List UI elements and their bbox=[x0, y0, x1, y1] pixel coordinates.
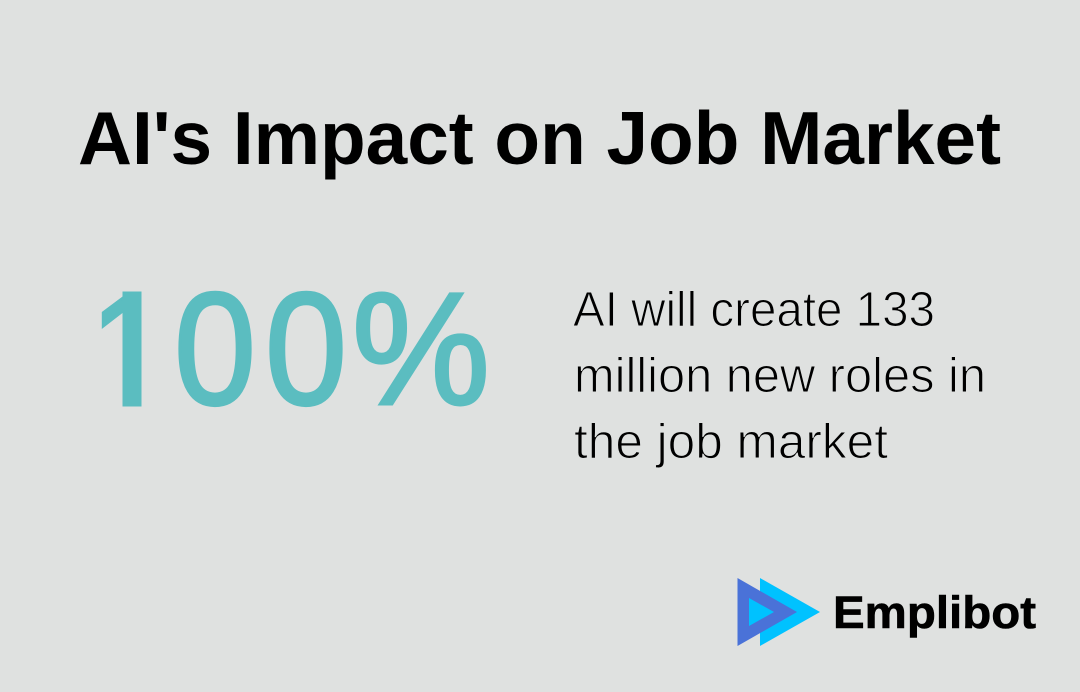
infographic canvas bbox=[80, 110, 1036, 646]
title: AI's Impact on Job Market bbox=[78, 96, 1001, 180]
icon: play triangles bbox=[738, 578, 820, 646]
description text: AI will create 133 bbox=[573, 283, 935, 337]
big statistic: 100%: % bbox=[352, 259, 490, 438]
logo wordmark: Emplibot bbox=[833, 587, 1036, 638]
description text: the job market bbox=[574, 415, 888, 469]
description text: million new roles in bbox=[574, 349, 986, 403]
big statistic: 100%: 0 bbox=[265, 259, 347, 438]
big statistic: 100%: 1 bbox=[89, 260, 171, 439]
Emplibot logo bbox=[738, 578, 1036, 646]
big statistic: 100%: 0 bbox=[174, 259, 256, 438]
big statistic: 100% bbox=[102, 290, 486, 408]
description text bbox=[573, 283, 986, 469]
